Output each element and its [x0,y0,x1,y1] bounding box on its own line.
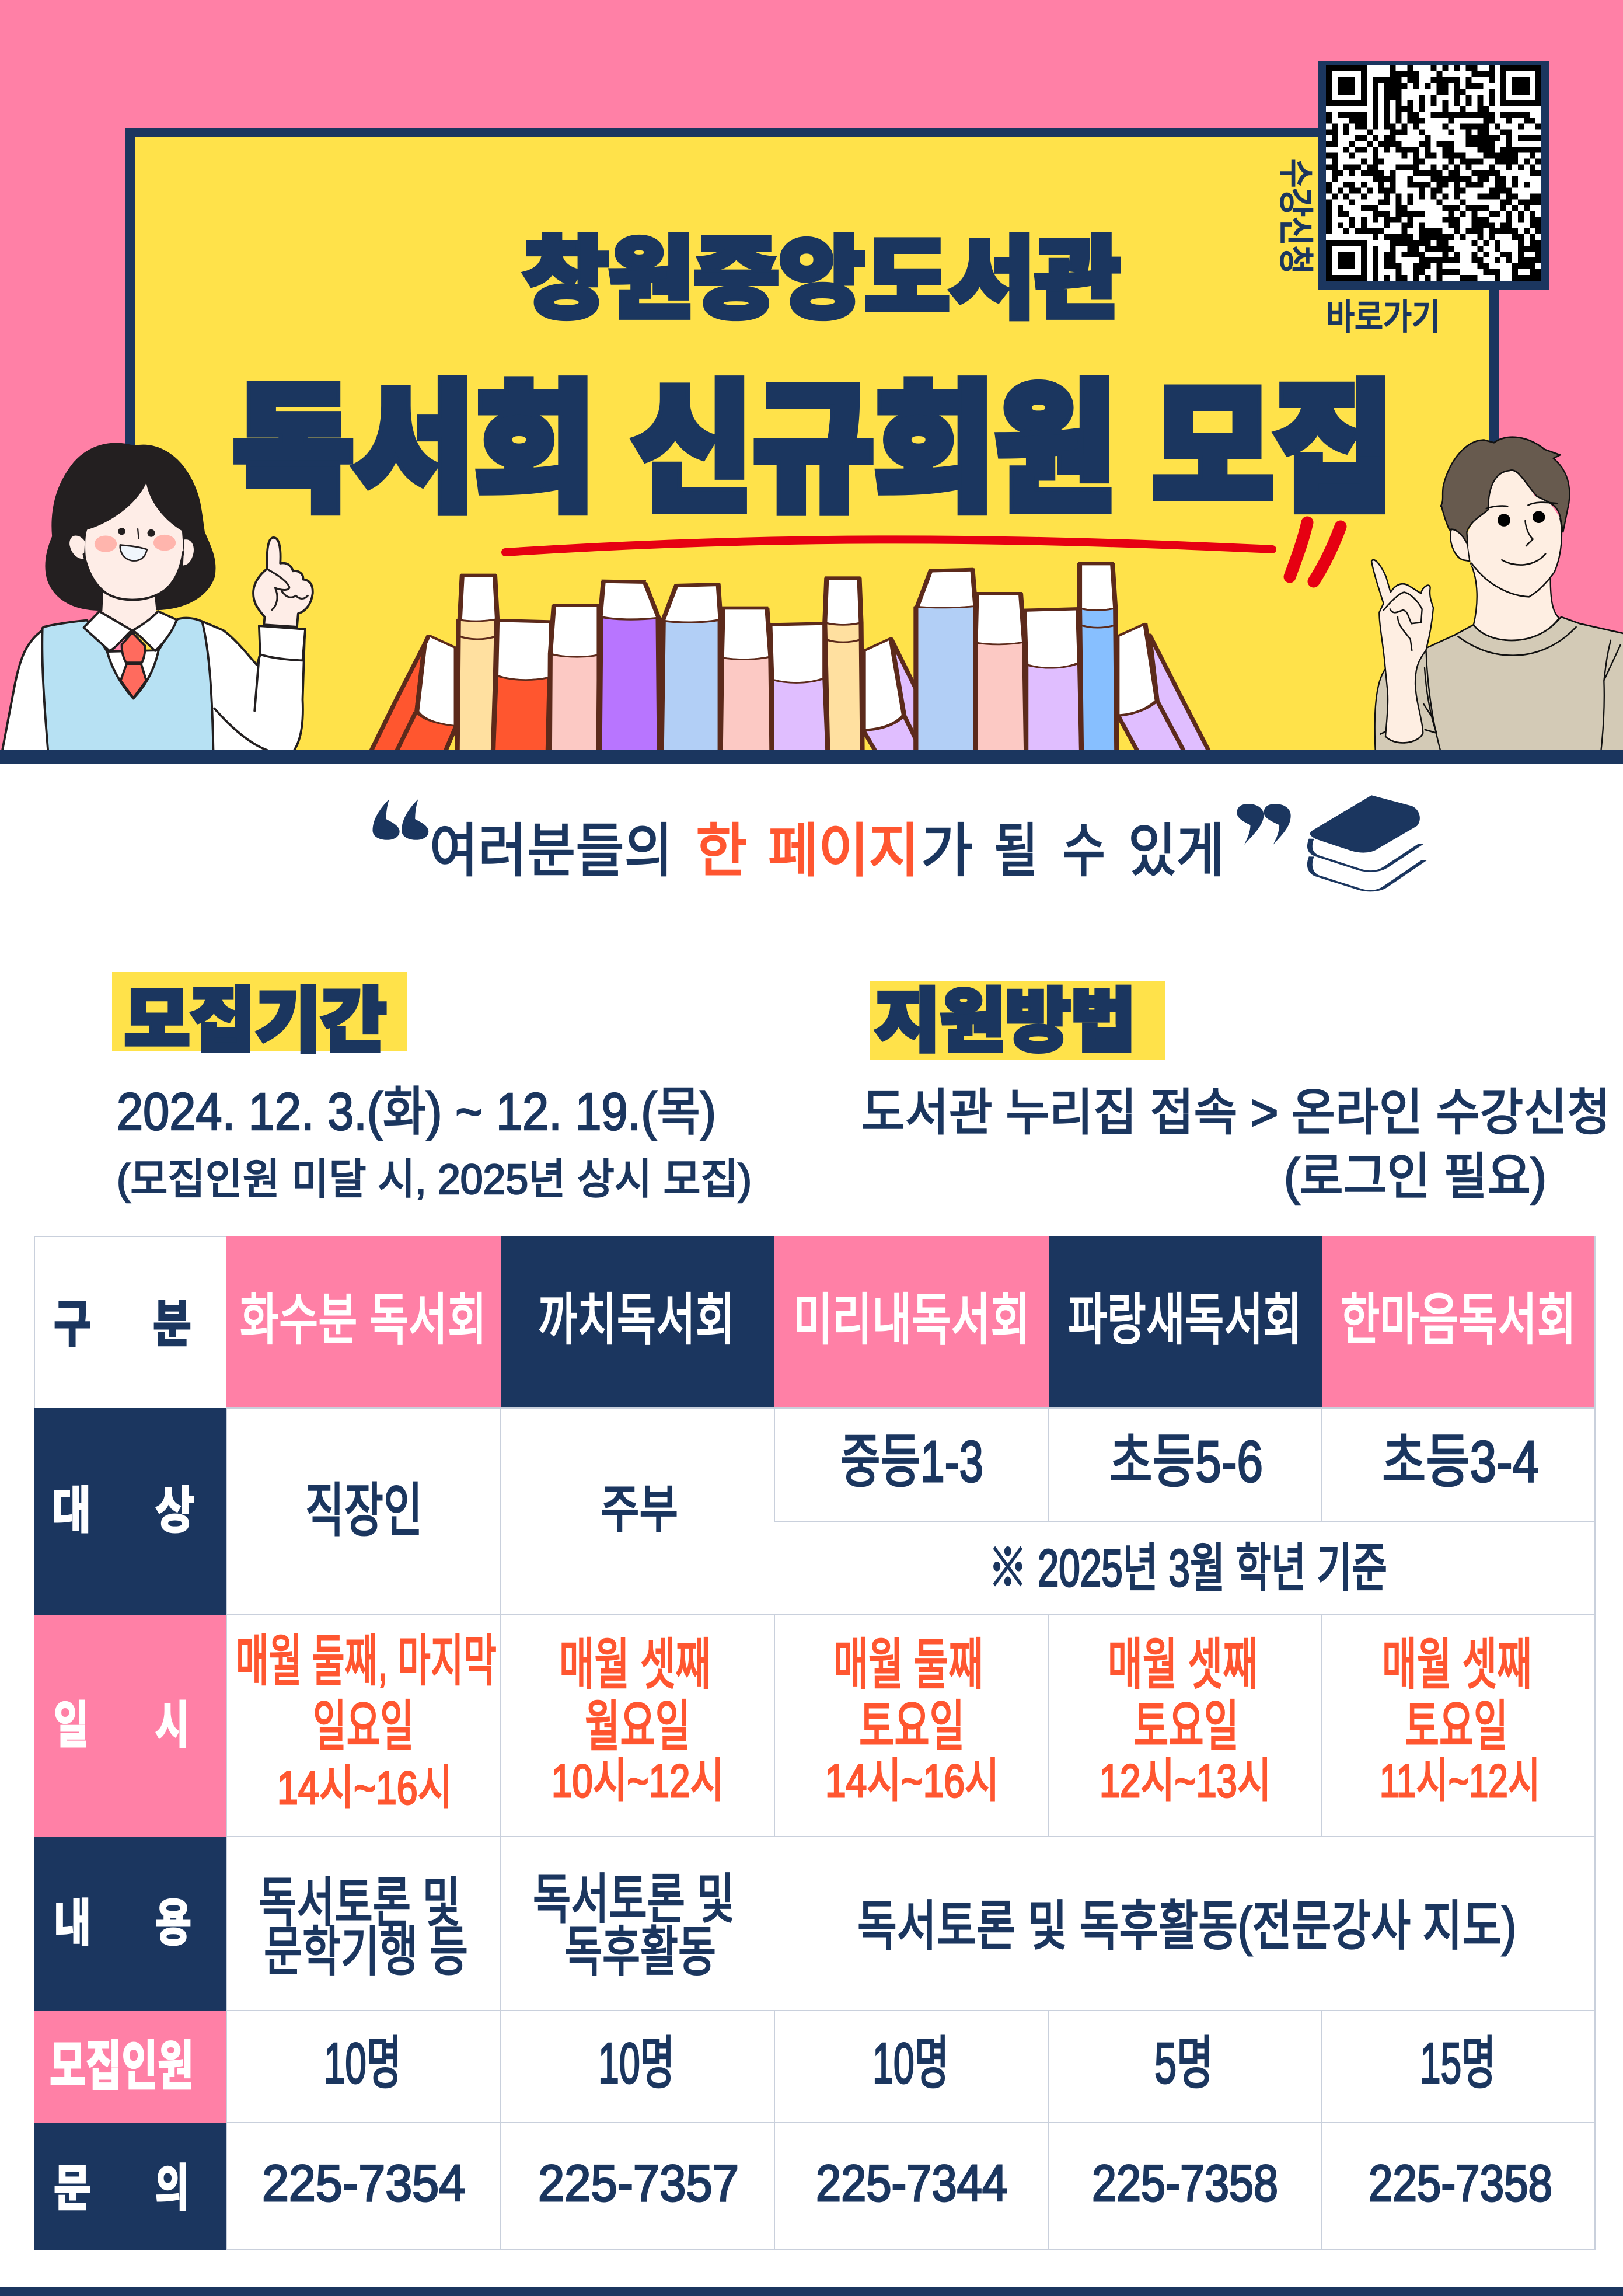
row: recruitment headcount [50,2031,1496,2096]
QR caption: course sign-up (rotated): 수강신청 [1276,159,1315,274]
row: target audience: 중등1-3 [840,1429,983,1494]
slogan text: 한 [696,818,747,884]
QR code block [1318,61,1549,290]
row: schedule [54,1630,1540,1814]
row: target audience: 대 [52,1483,91,1539]
row: schedule: 시 [155,1698,189,1754]
quote marks and book icon [372,795,1426,892]
QR caption: shortcut: 바로가기 [1326,298,1440,337]
panel: yellow board [130,133,1494,757]
row: schedule: 일 [54,1698,89,1754]
row: content [54,1870,1516,1982]
slogan text: 수 [1063,818,1105,884]
row: recruitment headcount: 5명 [1154,2031,1213,2095]
row: recruitment headcount: 10명 [598,2031,675,2095]
slogan text: 여러분들의 [430,818,673,884]
row: inquiries: 225-7357 [538,2154,739,2212]
row: inquiries: 225-7344 [816,2154,1007,2212]
row: schedule: 매월 둘째, 마지막 [236,1630,497,1692]
period dates: 2024. 12. 3.(화) ~ 12. 19.(목) [117,1083,716,1141]
row: content: 독후활동 [564,1922,716,1982]
row: recruitment headcount: 모집인원 [50,2037,194,2096]
header row: club names [54,1289,1576,1353]
navy footer bar [0,2287,1623,2296]
table cell fills [34,1236,1595,2250]
row: schedule: 매월 셋째 [559,1634,711,1696]
row: inquiries: 225-7358 [1369,2154,1552,2212]
row: schedule: 14시~16시 [825,1755,999,1807]
slogan text: 가 [921,818,973,884]
row: content: 문학기행 등 [264,1922,468,1982]
row: target audience: 직장인 [305,1478,423,1544]
title: recruiting new members: 독서회 신규회원 모집 [233,336,1394,539]
heading: recruitment period: 모집기간 [124,964,386,1065]
row: target audience: 주부 [601,1480,678,1538]
section: recruitment period [112,964,752,1203]
row: schedule: 월요일 [585,1696,690,1758]
heading: library name: 창원중앙도서관 [523,207,1121,336]
row: content: 내 [54,1896,91,1952]
row: inquiries: 의 [155,2161,189,2217]
row: inquiries: 225-7358 [1092,2154,1278,2212]
period note: (모집인원 미달 시, 2025년 상시 모집) [117,1156,752,1203]
row: recruitment headcount: 10명 [324,2031,402,2095]
row: schedule: 토요일 [1133,1696,1239,1758]
row: content: 독서토론 및 [259,1873,460,1933]
books illustration [369,562,1210,750]
slogan text: 있게 [1128,818,1224,884]
slogan text [430,818,1224,884]
header row: club names: 화수분 독서회 [240,1289,487,1351]
row: schedule: 12시~13시 [1100,1755,1271,1807]
row: target audience: 초등5-6 [1109,1429,1263,1494]
row: schedule: 일요일 [313,1696,414,1758]
row: recruitment headcount: 10명 [872,2031,949,2095]
header row: club names: 까치독서회 [538,1289,735,1351]
row: inquiries: 문 [54,2161,91,2217]
header row: club names: 분 [153,1297,191,1353]
row: schedule: 10시~12시 [552,1755,724,1807]
row: schedule: 매월 셋째 [1108,1634,1258,1696]
row: content: 독서토론 및 [533,1870,735,1929]
heading: how to apply: 지원방법 [875,965,1136,1065]
row: schedule: 토요일 [1405,1696,1508,1758]
row: recruitment headcount: 15명 [1420,2031,1496,2095]
row: target audience: 초등3-4 [1382,1429,1539,1494]
row: target audience: ※ 2025년 3월 학년 기준 [989,1539,1387,1598]
row: target audience: 상 [155,1483,194,1539]
row: schedule: 매월 셋째 [1382,1634,1532,1696]
panel: pink hero banner [0,0,1623,757]
row: schedule: 토요일 [859,1696,965,1758]
navy divider bar under hero [0,750,1623,764]
row: target audience [52,1429,1539,1598]
row: inquiries: 225-7354 [262,2154,466,2212]
row: schedule: 매월 둘째 [833,1634,983,1696]
QR code [1326,65,1541,281]
illustration: woman in vest pointing up [1,443,314,750]
row: schedule: 11시~12시 [1380,1755,1540,1807]
table: book club schedule [34,1236,1595,2250]
header row: club names: 미리내독서회 [793,1289,1030,1351]
slogan text: 페이지 [768,818,919,884]
red underline with two slashes [505,522,1341,581]
row: schedule: 14시~16시 [277,1762,452,1814]
slogan with quote marks and book icon [372,795,1424,891]
header row: club names: 파랑새독서회 [1068,1289,1302,1351]
row: inquiries [54,2154,1552,2217]
slogan text: 될 [994,818,1038,884]
header row: club names: 구 [54,1297,91,1353]
row: content: 용 [155,1896,191,1952]
section: how to apply [861,965,1611,1205]
illustration: man in beige sweater pointing up [1370,436,1623,750]
login required: (로그인 필요) [1284,1149,1547,1205]
